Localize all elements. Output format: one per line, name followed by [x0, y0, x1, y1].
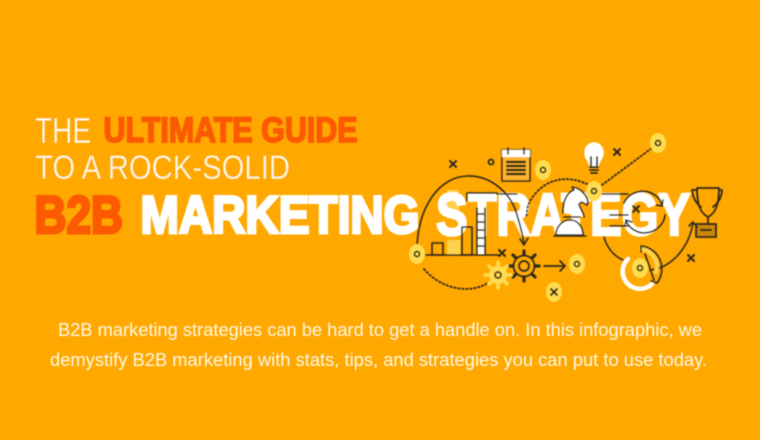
lower arcs — [604, 237, 623, 260]
arrow: curved to trophy — [650, 222, 697, 270]
dotted arc — [526, 179, 591, 218]
icon: trophy — [692, 188, 722, 237]
title line: the ultimate guide: ULTIMATE GUIDE — [104, 111, 358, 150]
letter outlines — [467, 193, 628, 226]
icon: calendar — [502, 148, 530, 181]
strategy illustration — [409, 133, 722, 302]
title line: the ultimate guide — [35, 110, 358, 151]
dotted line to top right — [602, 148, 652, 185]
title line: b2b marketing strategy: MARKETING — [140, 186, 420, 245]
intro paragraph — [50, 319, 707, 370]
title line: b2b marketing strategy: B2B — [34, 186, 123, 245]
bar chart with ladder — [422, 208, 498, 255]
large arc with arrow — [417, 176, 528, 246]
title line: b2b marketing strategy: STRATEGY — [436, 182, 690, 248]
dotted bottom arc — [424, 269, 488, 289]
title line: b2b marketing strategy — [34, 182, 690, 248]
title line: the ultimate guide: THE — [35, 110, 91, 151]
arrow: gear to dot — [544, 261, 565, 271]
yellow fill accents behind lettering — [447, 190, 460, 255]
paragraph line one: B2B marketing strategies can be hard to get a handle on. In this infographic, we — [58, 319, 702, 340]
icon: circular arrows — [624, 191, 665, 233]
icon: gear — [509, 251, 539, 281]
paragraph line two: demystify B2B marketing with stats, tips, and strategies you can put to use today. — [50, 349, 707, 370]
icon: chess knight — [554, 187, 588, 236]
yellow marker dots — [409, 133, 666, 302]
x marks — [450, 149, 694, 295]
title line: to a rock-solid: TO A ROCK-SOLID — [35, 149, 290, 187]
title — [34, 110, 690, 248]
icon: light bulb — [585, 143, 603, 173]
icon: donut chart — [623, 246, 662, 289]
